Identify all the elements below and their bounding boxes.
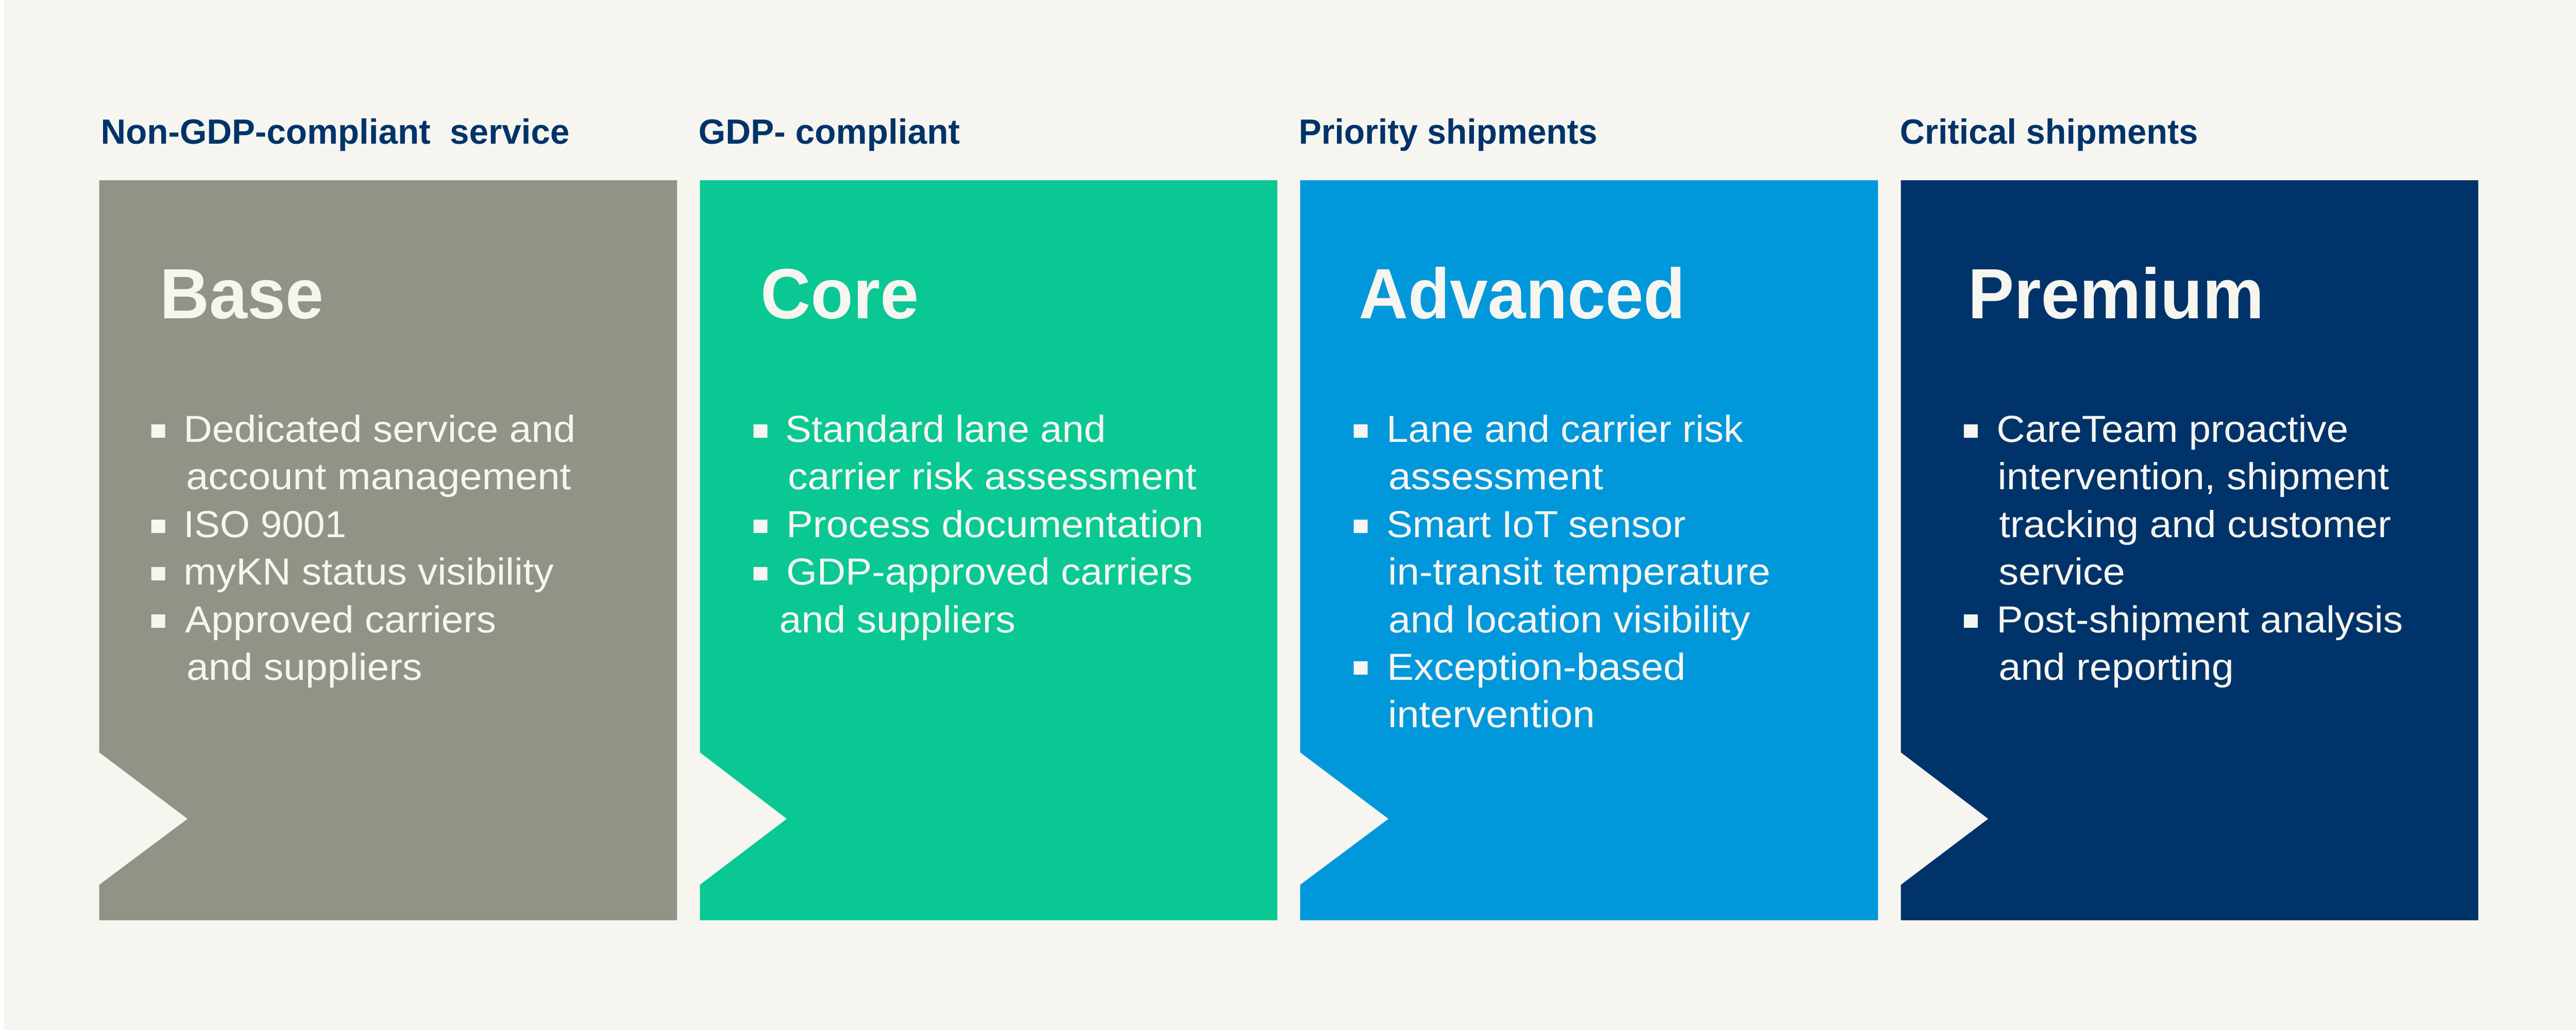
feature list: base xyxy=(151,408,575,688)
card title: base: Base xyxy=(160,254,324,334)
list item: lane and carrier risk: assessment xyxy=(1388,456,1603,497)
panel: core xyxy=(699,112,1277,920)
list item: standard lane xyxy=(754,408,1196,497)
list item: smart IoT sensor: and location visibility xyxy=(1388,599,1750,641)
list item: CareTeam: tracking and customer xyxy=(1999,504,2391,545)
list item: post-shipment analysis: and reporting xyxy=(1998,646,2234,688)
list item: post-shipment analysis xyxy=(1964,599,2403,688)
list item: GDP-approved carriers: and suppliers xyxy=(779,599,1015,641)
list item: CareTeam: CareTeam proactive xyxy=(1996,408,2348,450)
list item: CareTeam: service xyxy=(1998,551,2125,593)
list item: ISO 9001: ISO 9001 xyxy=(183,504,346,545)
panel: advanced xyxy=(1299,112,1878,920)
list item: standard lane: Standard lane and xyxy=(785,408,1106,450)
card background with notch: base xyxy=(99,180,677,920)
list item: approved carriers xyxy=(151,599,496,688)
list item: exception-based intervention: Exception-based xyxy=(1387,646,1686,688)
list item: dedicated service: Dedicated service and xyxy=(183,408,575,450)
list item: myKN status visibility: myKN status visibility xyxy=(183,551,554,593)
list item: smart IoT sensor xyxy=(1354,504,1770,641)
list item: CareTeam xyxy=(1964,408,2391,593)
list item: dedicated service: account management xyxy=(186,456,571,497)
feature list: advanced xyxy=(1354,408,1770,735)
list item: approved carriers: and suppliers xyxy=(187,646,422,688)
card background with notch: premium xyxy=(1901,180,2478,920)
list item: GDP-approved carriers: GDP-approved carriers xyxy=(786,551,1193,593)
audience label: GDP-compliant: GDP- compliant xyxy=(699,112,960,151)
panel: base xyxy=(99,112,677,920)
list item: post-shipment analysis: Post-shipment analysis xyxy=(1996,599,2403,641)
list item: process documentation: Process documentation xyxy=(786,504,1204,545)
list item: CareTeam: intervention, shipment xyxy=(1997,456,2389,497)
list item: dedicated service xyxy=(151,408,575,497)
list item: smart IoT sensor: in-transit temperature xyxy=(1388,551,1770,593)
list item: exception-based intervention xyxy=(1354,646,1686,735)
card title: core: Core xyxy=(760,254,919,334)
list item: lane and carrier risk: Lane and carrier risk xyxy=(1386,408,1743,450)
list item: approved carriers: Approved carriers xyxy=(185,599,496,641)
card title: advanced: Advanced xyxy=(1359,254,1685,334)
list item: lane and carrier risk xyxy=(1354,408,1743,497)
audience label: critical shipments: Critical shipments xyxy=(1900,112,2198,151)
card background with notch: advanced xyxy=(1300,180,1878,920)
list item: GDP-approved carriers xyxy=(754,551,1193,641)
card background with notch: core xyxy=(700,180,1277,920)
card title: premium: Premium xyxy=(1968,254,2264,334)
feature list: core xyxy=(754,408,1204,641)
panel: premium xyxy=(1900,112,2478,920)
feature list: premium xyxy=(1964,408,2403,688)
audience label: non-GDP-compliant service: Non-GDP-compliant service xyxy=(100,112,569,151)
list item: standard lane: carrier risk assessment xyxy=(788,456,1196,497)
audience label: priority shipments: Priority shipments xyxy=(1299,112,1597,151)
list item: smart IoT sensor: Smart IoT sensor xyxy=(1386,504,1686,545)
list item: exception-based intervention: intervention xyxy=(1388,694,1595,735)
